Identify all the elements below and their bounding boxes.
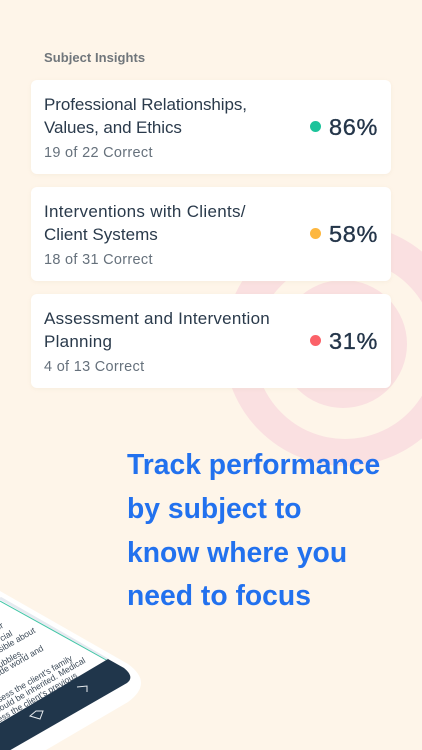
phone body bbox=[0, 591, 141, 750]
status dot green bbox=[310, 121, 321, 132]
headline: by subject to bbox=[127, 492, 302, 524]
headline: need to focus bbox=[127, 579, 311, 611]
status dot yellow bbox=[310, 228, 321, 239]
subject title 1: Values, and Ethics bbox=[44, 118, 182, 137]
top shadow line bbox=[0, 598, 108, 660]
teal progress line bbox=[0, 601, 108, 661]
icon: back arrow bbox=[30, 711, 43, 719]
panel: subject card 3 bbox=[31, 294, 391, 388]
score detail 3: 4 of 13 Correct bbox=[44, 358, 144, 374]
score detail 2: 18 of 31 Correct bbox=[44, 252, 153, 268]
status dot red bbox=[310, 335, 321, 346]
section label: Subject Insights bbox=[44, 50, 145, 65]
panel: subject card 2 bbox=[31, 187, 391, 281]
subject title 2 bbox=[44, 202, 246, 244]
headline: Track performance bbox=[127, 448, 380, 480]
icon: home chevron bbox=[77, 686, 87, 692]
subject title 3: Planning bbox=[44, 332, 112, 351]
percentage 2: 58% bbox=[329, 221, 378, 247]
navigation bar bbox=[0, 659, 130, 750]
percentage 1: 86% bbox=[329, 114, 378, 140]
headline: know where you bbox=[127, 536, 347, 568]
document text bbox=[0, 620, 87, 731]
headline bbox=[127, 448, 380, 611]
subject title 2: Interventions with Clients/ bbox=[44, 202, 246, 221]
subject title 3: Assessment and Intervention bbox=[44, 309, 270, 328]
score detail 1: 19 of 22 Correct bbox=[44, 144, 153, 160]
subject title 1: Professional Relationships, bbox=[44, 95, 247, 114]
subject title 2: Client Systems bbox=[44, 225, 158, 244]
subject title 1 bbox=[44, 95, 247, 137]
panel: subject card 1 bbox=[31, 80, 391, 174]
percentage 3: 31% bbox=[329, 328, 378, 354]
subject title 3 bbox=[44, 309, 270, 351]
phone mockup corner bbox=[0, 591, 141, 750]
